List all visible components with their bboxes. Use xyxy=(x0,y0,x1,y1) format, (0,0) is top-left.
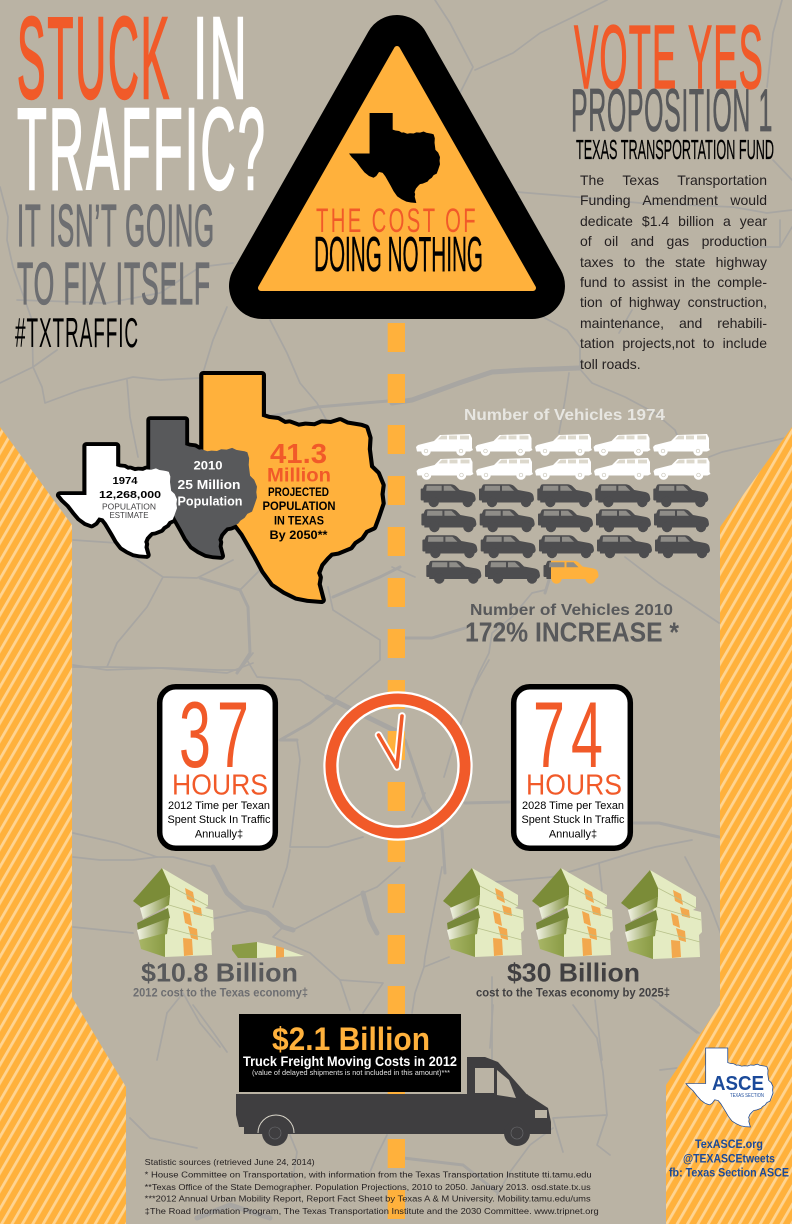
statistic sources: ‡The Road Information Program, The Texas Transportation Institute and the 2030 Committee. www.tripnet.org xyxy=(145,1206,599,1216)
stat: $10.8 billion: $10.8 Billion xyxy=(141,958,298,988)
caption: 2028 Time per Texan xyxy=(522,800,624,812)
clock hands xyxy=(378,716,402,767)
partial orange car xyxy=(551,560,598,584)
black cargo box xyxy=(239,1014,461,1092)
caption: 2012 cost to the Texas economy‡ xyxy=(133,986,308,1000)
2050 population text: POPULATION xyxy=(262,501,336,513)
proposition description text: toll roads. xyxy=(580,356,641,372)
hours label: HOURS xyxy=(526,769,622,801)
1974 population text: 1974 xyxy=(112,475,138,487)
1974 population text xyxy=(99,475,161,520)
hours label: HOURS xyxy=(172,769,268,801)
2050 population text: By 2050** xyxy=(270,530,328,542)
money: 2012 cost xyxy=(133,868,308,1000)
1974 population text: POPULATION xyxy=(102,501,156,511)
caption xyxy=(522,800,625,841)
icon: texas silhouette on sign xyxy=(349,113,440,203)
caption: cost to the Texas economy by 2025‡ xyxy=(476,986,670,1000)
icon: truck silhouette xyxy=(236,1057,551,1146)
title: stuck in traffic xyxy=(17,0,267,214)
1974 population text: 12,268,000 xyxy=(99,489,161,501)
2050 population text xyxy=(262,438,336,542)
text: TO FIX ITSELF xyxy=(17,251,211,317)
caption: Spent Stuck In Traffic xyxy=(168,814,271,826)
stat: $30 billion: $30 Billion xyxy=(507,958,640,988)
text: TRAFFIC? xyxy=(17,84,267,214)
card: 37 hours xyxy=(160,682,275,848)
icon: money stacks xyxy=(443,868,702,959)
proposition description text: dedicate $1.4 billion a year xyxy=(580,213,767,229)
2050 population text: 41.3 xyxy=(270,438,327,469)
caption xyxy=(168,800,271,841)
warning sign xyxy=(261,48,533,288)
proposition description text: maintenance, and rehabili- xyxy=(580,315,767,331)
proposition description text: tion of highway construction, xyxy=(580,294,767,310)
2010 population text: 2010 xyxy=(194,458,223,472)
truck with freight cost xyxy=(236,1014,551,1146)
heading: vote yes proposition 1 xyxy=(571,8,774,165)
population infographic: three texas shapes xyxy=(60,375,382,600)
center road dashes xyxy=(388,323,405,1219)
money: 2025 cost xyxy=(443,868,702,1000)
heading: vehicles 1974: Number of Vehicles 1974 xyxy=(464,407,665,424)
white cars: 1974 xyxy=(416,434,710,480)
2010 population text xyxy=(178,458,243,509)
proposition description text: fund to assist in the comple- xyxy=(580,274,767,290)
heading: vehicles 2010: Number of Vehicles 2010 xyxy=(470,602,673,619)
caption: 2012 Time per Texan xyxy=(168,800,270,812)
sign text: the cost of: THE COST OF xyxy=(316,202,478,240)
2050 population text: Million xyxy=(267,466,331,487)
2010 population text: 25 Million xyxy=(178,477,241,492)
statistic sources: **Texas Office of the State Demographer. Population Projections, 2010 to 2050. January 2013. osd.state.tx.us xyxy=(145,1182,591,1192)
footnote in box: (value of delayed shipments is not included in this amount)*** xyxy=(252,1068,450,1077)
caption: Annually‡ xyxy=(549,829,597,841)
social contact links: TexASCE.org xyxy=(695,1139,763,1151)
icon: money stack xyxy=(133,868,214,957)
stat: $2.1 billion: $2.1 Billion xyxy=(272,1021,430,1057)
2050 population text: IN TEXAS xyxy=(274,516,324,528)
proposition description text: Funding Amendment would xyxy=(580,192,767,208)
statistic sources xyxy=(145,1157,599,1216)
digits 37: 37 xyxy=(179,682,255,787)
ASCE logo: ASCE xyxy=(712,1073,764,1095)
1974 population text: ESTIMATE xyxy=(110,510,149,520)
2010 population text: Population xyxy=(178,494,243,509)
ASCE logo xyxy=(686,1048,773,1127)
clock xyxy=(324,692,472,840)
ASCE logo: TEXAS SECTION xyxy=(730,1093,764,1099)
social contact links: @TEXASCEtweets xyxy=(683,1154,775,1166)
text: #TXTRAFFIC xyxy=(15,309,139,356)
proposition description text xyxy=(580,172,767,372)
proposition description text: tation projects,not to include xyxy=(580,335,767,351)
statistic sources: ***2012 Annual Urban Mobility Report, Report Fact Sheet by Texas A & M University. Mobility.tamu.edu/ums xyxy=(145,1194,591,1204)
text: IT ISN’T GOING xyxy=(17,193,215,259)
right striped road shoulder xyxy=(666,427,792,1224)
subtitle: it isn't going to fix itself xyxy=(17,193,215,317)
caption: Spent Stuck In Traffic xyxy=(522,814,625,826)
dark cars: 2010 xyxy=(421,484,710,584)
left striped road shoulder xyxy=(0,427,126,1224)
digits 74: 74 xyxy=(533,682,609,787)
statistic sources: * House Committee on Transportation, with information from the Texas Transportation Institute tti.tamu.edu xyxy=(145,1170,592,1180)
statistic sources: Statistic sources (retrieved June 24, 2014) xyxy=(145,1157,315,1167)
proposition description text: The Texas Transportation xyxy=(580,172,767,188)
card: 74 hours xyxy=(514,682,630,848)
vehicle pictogram chart xyxy=(416,407,710,648)
proposition description text: taxes to the state highway xyxy=(580,254,767,270)
proposition description text: of oil and gas production xyxy=(580,233,767,249)
social contact links xyxy=(669,1139,789,1180)
stat: 172% increase: 172% INCREASE * xyxy=(465,617,679,648)
2050 population text: PROJECTED xyxy=(268,487,329,499)
caption: Annually‡ xyxy=(195,829,243,841)
caption: Truck Freight Moving Costs in 2012 xyxy=(243,1053,457,1069)
warning sign: DOING NOTHING xyxy=(314,228,483,282)
icon: partial money bundle xyxy=(232,942,304,958)
